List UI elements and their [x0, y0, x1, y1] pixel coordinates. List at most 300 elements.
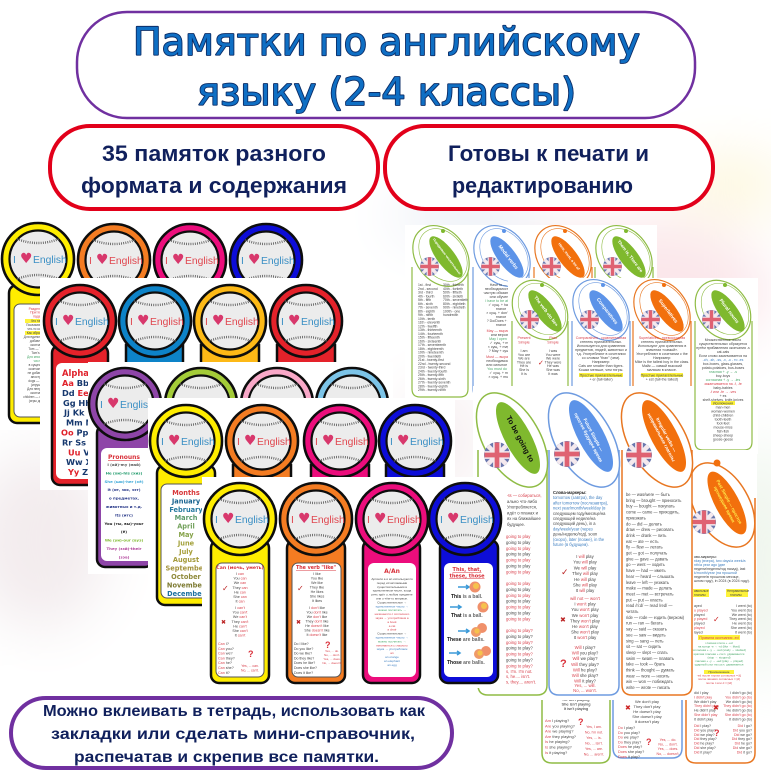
bookmark: future simple: I won't play	[574, 602, 596, 607]
bookmark: modal verbs: You must do your	[487, 367, 516, 371]
bookmark: the verb to be: You are	[518, 353, 530, 357]
bookmark: a/an: I	[367, 515, 370, 526]
bookmark bottom: present continuous: No, ... isn't.	[585, 742, 603, 746]
bookmark: past simple: Did you play?	[694, 728, 716, 732]
bookmark bottom: present simple: We don't play	[635, 699, 659, 704]
bookmark: plural nouns: -ch, -sh, -ss, -x, -o - то -es	[703, 358, 744, 362]
bookmark: yellow narrative: падеж	[33, 314, 44, 318]
bottom pill	[11, 698, 452, 768]
badge: blue	[230, 224, 302, 296]
bookmark: alphabet: Rr Ss Tt	[62, 437, 98, 447]
row: those are balls	[447, 646, 491, 666]
bookmark: ordinal numbers: Порядковые числительные	[432, 238, 462, 275]
bookmark: irregular verbs: win — won — побеждать	[626, 679, 673, 684]
bookmark: past simple: недели/неделю/год назад), last	[694, 567, 745, 571]
bookmark: past simple: согласная + -y → -ied (study → studied)	[692, 648, 746, 652]
bookmark bottom: present simple: Does he play?	[618, 745, 642, 749]
bookmark: past simple: did I play	[694, 691, 709, 695]
bookmark: can: Can we?	[218, 652, 233, 656]
bookmark: future simple: следующем году/месяце/на	[553, 511, 606, 516]
bookmark: future simple: day/week/year (через	[553, 526, 593, 531]
bookmark: past simple: You went (to)	[731, 608, 752, 612]
bookmark: a/an: an	[390, 651, 394, 655]
bookmark bottom: present simple: ?	[646, 737, 652, 747]
bookmark: past simple: ударный слог на согл. удваивается	[695, 663, 744, 667]
bookmark: past simple: ?	[714, 728, 720, 738]
bookmark: to be going to: s, I'm. I'm not.	[506, 669, 532, 674]
bookmark: months: January	[171, 497, 201, 505]
bookmark: to be going to: going to play	[506, 616, 531, 621]
bookmark: pink: English	[335, 437, 369, 448]
bookmark: future simple: It will play	[576, 588, 594, 593]
bookmark: irregular verbs: draw — drew — рисовать	[626, 527, 674, 532]
bookmark: ordinal numbers: 20th - twentieth	[418, 354, 441, 358]
bookmark: pronouns: ♥	[107, 396, 120, 412]
bookmark: the verb like: No, ... doesn't.	[322, 661, 342, 665]
pill: ready to print: Готовы к печати и	[448, 141, 649, 166]
bookmark: yellow narrative: Притяжат.	[30, 311, 46, 315]
bookmark: months: April	[177, 523, 195, 531]
bookmark: irregular verbs: sleep — slept — спать	[626, 650, 668, 655]
bookmark: can: You can't	[233, 611, 247, 615]
bookmark: superlatives: Mike is the tallest boy in the class.	[635, 360, 689, 364]
bookmark: to be going to: going to play	[506, 564, 531, 568]
bookmark: the verb to be: Present	[517, 336, 531, 340]
bookmark: past simple: Did we play?	[694, 733, 715, 737]
bottom pill: распечатав и скрепив все памятки.	[74, 749, 379, 766]
bookmark: the verb like: They don't like	[305, 620, 329, 624]
bookmark: the verb to be: I was	[549, 349, 557, 353]
bookmark: pronouns: I	[100, 400, 103, 411]
bookmark: ordinal numbers: 40th - fortieth	[443, 287, 463, 291]
bookmark: past simple: played	[694, 613, 705, 617]
bookmark: red: English	[301, 317, 335, 328]
bookmark bottom: present continuous: No, ... aren't.	[584, 752, 604, 756]
bookmark: superlatives: Майк — самый высокий	[642, 364, 682, 368]
title text: языку (2-4 классы)	[197, 70, 576, 114]
badge: pink: I	[165, 256, 168, 267]
bookmark: a/an: a cat	[389, 624, 395, 628]
bookmark: past simple: неделе/в прошлом месяце,	[694, 575, 740, 579]
bookmark: future simple: I will play	[576, 554, 594, 559]
bookmark: plural nouns: fish-fish	[717, 430, 729, 434]
bookmark: alphabet: English	[75, 317, 109, 328]
bookmark: there is tag: There is, There are	[616, 239, 644, 274]
bookmark: ordinal numbers	[401, 215, 481, 397]
bookmark: ordinal numbers: 90th - ninetieth	[443, 306, 466, 310]
bookmark: to be going to: ях на ближайшее	[507, 516, 541, 521]
bookmark: the verb like: She likes	[310, 594, 324, 598]
bookmark: yellow narrative: (игрушки)	[31, 383, 45, 387]
bookmark: modal verbs: × сущ. + don't/doe	[486, 311, 516, 315]
bookmark: future simple: It won't play	[574, 635, 596, 640]
bookmark: a/an: единственном числе, когда	[373, 589, 412, 593]
bookmark: the verb to be: We are	[518, 357, 530, 361]
bookmark: can: They can't	[232, 620, 248, 624]
pill: ready to print: редактированию	[452, 173, 633, 198]
bookmark: can: Can it?	[218, 671, 230, 675]
bookmark: ordinal numbers: 4th - fourth	[418, 294, 435, 298]
bookmark: plural nouns: foot-feet	[717, 422, 729, 426]
bookmark: to be going to: going to play?	[506, 646, 533, 651]
bookmark: the verb like: I don't like	[309, 606, 325, 610]
bookmark: alphabet: Oo Pp Qq	[61, 428, 104, 438]
bookmark: past simple: ✖	[713, 705, 719, 712]
bookmark: ordinal numbers: 100th - one	[443, 309, 460, 313]
title pill	[77, 12, 695, 118]
title text	[133, 20, 640, 114]
row: this is a ball	[451, 582, 483, 600]
badge: pink: English	[185, 256, 219, 267]
bookmark: future simple: future (в будущем).	[553, 542, 589, 547]
bookmark: ordinal numbers: 23rd - twenty-third	[418, 366, 445, 370]
bottom pill: Можно вклеивать в тетрадь, использовать как	[43, 703, 426, 720]
bookmark: can: Can they?	[218, 656, 235, 660]
bookmark: comparatives: Comparatives	[595, 297, 619, 326]
bookmark bottom: present continuous: Are you playing?	[545, 723, 575, 728]
badge: pink	[154, 224, 226, 296]
bookmark: modal verbs: глагол	[496, 323, 506, 327]
bookmark: blue: I	[130, 317, 133, 328]
bookmark: ordinal numbers: 29th - twenty-ninth	[418, 388, 446, 392]
bookmark: can: ♥	[222, 511, 235, 527]
bookmark: irregular verbs: sing — sang — петь	[626, 638, 664, 643]
bookmark: ordinal numbers: 7th - seventh	[418, 306, 438, 310]
bookmark: irregular verbs: read /ri:d/ — read /red/ —	[626, 603, 673, 608]
bookmark: pronouns: I (ай)-my (май)	[107, 462, 141, 467]
bookmark: yellow narrative: Что такое	[31, 319, 45, 323]
bookmark: comparatives: степень прилагательных.	[580, 340, 622, 344]
bookmark: comparatives: Простые прилагательные	[580, 374, 622, 378]
bookmark: to be going to: going to play?	[506, 640, 533, 645]
bookmark: a/an: a chair	[387, 628, 397, 632]
bookmark: yellow narrative: добавляем	[30, 339, 46, 343]
bookmark: the verb like: Do they like?	[294, 656, 314, 660]
bookmark: irregular verbs: Irregular verbs —	[655, 417, 678, 453]
bookmark: modal verbs: или вероятн	[491, 333, 511, 337]
bookmark: alphabet: Dd Ee Ff	[62, 388, 101, 398]
bookmark: superlatives: Простые прилагательные	[641, 374, 683, 378]
bookmark: to be going to: будущее.	[507, 522, 525, 527]
bookmark: to be going to: идёт о планах и	[507, 510, 539, 515]
bookmark: to be going to: going to play	[506, 540, 531, 545]
bookmark: the verb like: ✓	[297, 584, 304, 593]
bookmark: pronouns	[89, 368, 161, 567]
pill: ready to print	[385, 126, 713, 209]
bookmark: future simple: We will play	[574, 565, 596, 570]
bookmark: superlatives: степень прилагательных.	[641, 340, 683, 344]
bookmark: orange: ♥	[244, 433, 257, 449]
left sheet 4: months row	[148, 398, 455, 610]
bookmark: superlatives: Superlatives	[657, 298, 679, 325]
bookmark: ordinal numbers: 5th - fifth	[418, 298, 431, 302]
bookmark: irregular verbs: hear — heard — слышать	[626, 574, 674, 579]
bookmark: past simple: Did they play?	[694, 737, 717, 741]
bookmark: the verb like: It doesn't like	[307, 633, 327, 637]
bookmark: the verb to be: We were	[546, 357, 560, 361]
bookmark: can: She can	[233, 595, 247, 599]
bookmark: yellow narrative: ♥	[20, 251, 33, 267]
bookmark: the verb to be: It is	[521, 372, 527, 376]
bookmark: pink: I	[315, 437, 318, 448]
bookmark: past simple: y played	[694, 617, 707, 621]
bookmark: past simple: Did she go?	[733, 746, 752, 750]
bookmark: irregular verbs: make — made — делать	[626, 586, 672, 591]
bookmark: irregular verbs: bring — brought — приносить	[626, 498, 681, 503]
bookmark bottom: present continuous: She isn't playing	[561, 702, 591, 707]
bookmark: superlatives: + est (tall-the tallest)	[646, 378, 678, 382]
bookmark: the verb like: Does he like?	[294, 661, 315, 665]
bookmark: pronouns: its (итс)	[115, 512, 133, 517]
bookmark: irregular verbs: come — came — приходить,	[626, 510, 680, 515]
bookmark: plural nouns: путём прибавления окончания -s	[696, 346, 750, 350]
bookmark: can: Can you?	[218, 647, 234, 651]
bookmark: irregular verbs: see — saw — видеть	[626, 632, 666, 637]
badge: blue: ♥	[248, 252, 261, 268]
left sheet 5: front row of bookmarks	[202, 477, 505, 688]
bookmark bottom: present continuous: ?	[578, 717, 584, 727]
bookmark: the verb like: No, ... don't.	[324, 653, 340, 657]
bookmark: comparatives: предметов, людей, животных и	[575, 348, 627, 352]
bookmark: months: ♥	[168, 433, 181, 449]
bookmark: future simple: They won't play	[570, 618, 600, 623]
bookmark: future simple: after tomorrow (послезавтра),	[553, 500, 608, 505]
bookmark: this that these those: English	[460, 515, 494, 526]
bookmark: past simple: после звонких согласных = [d]	[698, 677, 740, 681]
bookmark: past simple: It didn't go (to)	[729, 717, 752, 721]
bookmark: past simple: ayed	[694, 604, 702, 608]
bookmark: ordinal numbers: 15th - fifteenth	[418, 336, 440, 340]
bookmark: pronouns: It (ит, зис, зэт)	[108, 487, 141, 492]
bookmark: months: I	[161, 437, 164, 448]
bookmark bottom: present continuous: Yes, ... are.	[585, 747, 603, 751]
bookmark: yellow narrative: Для множеств.	[27, 355, 49, 359]
bookmark: modal verbs: ? May + сущ. +	[489, 349, 513, 353]
bookmark: future simple: следующий день), in a	[553, 521, 596, 526]
bookmark: ordinal numbers: 19th - nineteenth	[418, 350, 444, 354]
right sheet 2: grammar bookmarks	[501, 269, 762, 454]
bookmark: pronouns: (ё)	[121, 529, 127, 534]
bookmark: the verb like: He doesn't like	[305, 624, 329, 628]
bookmark: the verb like: Do we like?	[294, 652, 312, 656]
bookmark: comparatives: Используется для сравнения	[577, 344, 625, 348]
bookmark: comparatives: Comparatives - сравнительная	[576, 336, 626, 340]
bookmark: past simple: -ed после глухих согласных = [t]	[697, 674, 741, 678]
row: this is a ball: This is a ball.	[451, 594, 483, 600]
bookmark: the verb like: She doesn't like	[304, 628, 330, 632]
bookmark: ordinal numbers: 13th - thirteenth	[418, 328, 442, 332]
bookmark: the verb to be: He was	[547, 364, 559, 368]
bookmark: to be going to: going to play	[506, 534, 531, 539]
bookmark bottom: present continuous: Am I playing?	[545, 718, 569, 723]
bookmark: to be going to: going to play	[506, 552, 531, 557]
bookmark: past simple: nth/a year ago (две	[694, 563, 725, 567]
bookmark: can: ✓	[222, 584, 229, 593]
badge: orange: ♥	[96, 252, 109, 268]
bookmark: was were tag	[523, 215, 603, 327]
bookmark: modal verbs: необходимость или	[485, 287, 517, 291]
bookmark: to be going to	[462, 381, 562, 695]
bookmark: to be going to: going to play	[506, 605, 531, 610]
bookmark bottom: present continuous: Are we playing?	[545, 729, 573, 734]
bookmark: plural nouns: Исключения	[713, 402, 733, 406]
bookmark: past simple: ово-маркеры:	[694, 555, 717, 559]
bookmark: can: ?	[248, 649, 254, 659]
bookmark: there is tag	[584, 215, 664, 327]
bookmark: past simple: гласная + -y → +ed (play → played)	[695, 659, 743, 663]
bookmark: can: He can	[234, 590, 246, 594]
bookmark: future simple: (скоро), later (позже), in the	[553, 537, 605, 542]
bookmark: plural nouns: cat-cats	[717, 350, 729, 354]
bookmark bottom: present continuous	[542, 600, 610, 763]
bookmark: the verb to be: Past	[549, 336, 558, 340]
bookmark: pink	[304, 405, 376, 495]
bookmark: orange: I	[237, 437, 240, 448]
bookmark: can: Yes, ... can.	[241, 664, 259, 668]
bookmark: ordinal numbers: 6th - sixth	[418, 302, 433, 306]
bookmark: irregular verbs: приезжать	[626, 515, 646, 520]
bookmark: plural nouns: tooth-teeth	[715, 418, 731, 422]
bookmark: pronouns: English	[120, 400, 154, 411]
bookmark: a/an: единственное число →	[376, 636, 408, 640]
row: those are balls: Those are balls.	[447, 660, 485, 666]
bookmark bottom: present continuous: Is it playing?	[545, 750, 567, 755]
bookmark: months: Months	[172, 489, 200, 497]
bookmark: future simple: She won't play	[571, 630, 599, 635]
pill: 35 reminders: 35 памяток разного	[102, 141, 326, 166]
bookmark: irregular verbs: be — was/were — быть	[626, 492, 670, 497]
bookmark bottom: present simple: He doesn't play	[633, 709, 661, 714]
bookmark: future simple: They will play	[572, 571, 598, 576]
bookmark: irregular verbs: think — thought — думать	[626, 668, 674, 672]
bookmark: a/an: звука → употребляем	[377, 647, 407, 651]
title text: Памятки по английскому	[133, 20, 640, 64]
pill: 35 reminders	[50, 126, 378, 209]
bookmark: irregular verbs: say — said — сказать	[626, 627, 667, 632]
bookmark: the verb like: Yes, ... does.	[323, 657, 341, 661]
bookmark: past simple: We went (to)	[732, 613, 752, 617]
bookmark: past simple: Did it go?	[737, 750, 752, 754]
bookmark: months	[150, 405, 222, 605]
bookmark: the verb to be: I am	[520, 349, 528, 353]
bookmark: modal verbs: ✓ сущ. + may	[490, 341, 512, 345]
bookmark: plural nouns: mouse-mice	[713, 426, 733, 430]
bookmark: months: November	[167, 581, 206, 589]
bookmark: months: March	[175, 514, 198, 522]
bookmark: comparatives: Например:	[592, 360, 610, 364]
bookmark: alphabet: Uu Vv	[68, 447, 95, 457]
bookmark: to be going to: going to play?	[506, 628, 533, 633]
bookmark: past simple: He went (to)	[732, 622, 752, 626]
bookmark bottom: present simple: No, ... doesn't.	[656, 752, 680, 756]
bookmark: blue: ♥	[397, 433, 410, 449]
bookmark: past simple: Did he go?	[735, 742, 752, 746]
bookmark: months: February	[169, 506, 203, 514]
bookmark: months: December	[167, 590, 206, 598]
bookmark: future simple: She will play	[573, 582, 597, 588]
bookmark: irregular verbs: write — wrote — писать	[626, 685, 670, 690]
bookmark: ordinal numbers: 2nd - second	[418, 287, 438, 291]
bookmark: ordinal numbers: 3rd - third	[418, 290, 433, 294]
bookmark: modal verbs: May I open the	[489, 337, 513, 341]
bookmark: past simple: We didn't go (to)	[726, 700, 752, 704]
bookmark: red	[270, 285, 342, 385]
bookmark: future simple: день/неделю/год), soon	[553, 532, 598, 537]
bookmark bottom: present simple: She doesn't play	[632, 714, 662, 719]
bookmark: yellow narrative	[2, 223, 74, 423]
bookmark: past simple: Did I go?	[738, 724, 752, 728]
bookmark: to be going to: going to play?	[506, 663, 533, 668]
bookmark: modal verbs: I have to be at work	[485, 299, 517, 303]
bookmark: was were tag: Have, must, a lot of	[557, 242, 581, 271]
bookmark: yellow narrative: children — children's	[23, 395, 53, 399]
bookmark: to be going to: To be going to	[504, 414, 536, 464]
bookmark: superlatives: Superlatives - превосходная	[639, 336, 685, 340]
bookmark: future simple: Will it play?	[574, 679, 596, 684]
bookmark: modal verbs: глагол	[496, 307, 506, 311]
bookmark: irregular verbs	[607, 381, 707, 695]
bookmark bottom: present continuous: He isn't playing	[562, 697, 590, 702]
left sheet 2: alphabet row	[40, 278, 346, 490]
bookmark: a/an: или о чём-то впервые.	[376, 596, 408, 600]
right sheet 3: to be going to, future simple, irregular verbs	[462, 381, 707, 700]
bookmark: pronouns: о предметах,	[109, 496, 140, 501]
bookmark: past simple: I didn't go (to)	[730, 691, 752, 695]
bookmark: irregular verbs: sit — sat — сидеть	[626, 644, 661, 649]
bookmark: to be going to: going to play	[506, 593, 531, 598]
bookmark: a/an: начинается с согласного	[375, 612, 410, 616]
bookmark: irregular verbs: wear — wore — носить	[626, 673, 669, 678]
bookmark: irregular verbs: eat — ate — есть	[626, 539, 658, 544]
bookmark: a/an	[356, 483, 428, 683]
bookmark: plural nouns: согласная + -y → -ies	[706, 378, 740, 382]
bookmark: future simple: следующей неделе/на	[553, 516, 596, 521]
bookmark: superlatives: значении «самый».	[646, 348, 678, 352]
bookmark: months: May	[178, 531, 194, 539]
bookmark: modal verbs: Modal verbs	[497, 244, 519, 271]
bookmark: plural nouns: boy-boys	[716, 374, 730, 378]
bookmark bottom: present simple: They don't play	[633, 704, 661, 709]
bookmark bottom: present simple: Do I play?	[618, 726, 635, 730]
bookmark bottom: present simple: Does it play?	[618, 755, 640, 759]
bookmark: comparatives: со словом "than" (чем).	[582, 356, 620, 360]
bookmark bottom: present simple: ✖	[625, 705, 631, 712]
bookmark: yellow narrative: окончание	[30, 391, 46, 395]
bookmark: past simple: Did they go?	[732, 737, 752, 741]
bookmark: the verb to be: Simple	[547, 340, 559, 344]
bookmark: yellow narrative: Разделение	[29, 307, 47, 311]
bookmark: irregular verbs: take — took — брать	[626, 662, 665, 667]
bookmark: modal verbs: × сущ. + may no	[488, 345, 514, 349]
bookmark: future simple: No, ... won't.	[573, 688, 597, 693]
bookmark: can: I	[215, 515, 218, 526]
bookmark: past simple: played	[694, 622, 705, 626]
bookmark: this that these those: This, that,	[453, 567, 482, 573]
bookmark: the verb like	[280, 483, 352, 683]
bookmark: past simple: гласная слога + -ed	[705, 641, 733, 645]
bookmark: can: I can't	[235, 606, 245, 610]
bookmark: alphabet: Ww Xx	[66, 457, 98, 467]
pill: 35 reminders: формата и содержания	[81, 173, 347, 198]
bookmark: future simple: ✖	[560, 617, 566, 624]
bookmark: comparatives: + er (tall-taller)	[589, 378, 613, 382]
bookmark: past simple: It went (to)	[735, 630, 752, 634]
bookmark: to be going to: s, he.... isn't.	[506, 674, 530, 679]
bookmark: alphabet: Mm Nn	[66, 418, 98, 428]
bookmark: the verb to be: It was	[548, 372, 558, 376]
bookmark: blue: English	[150, 317, 184, 328]
bookmark: can: He can't	[233, 624, 247, 628]
